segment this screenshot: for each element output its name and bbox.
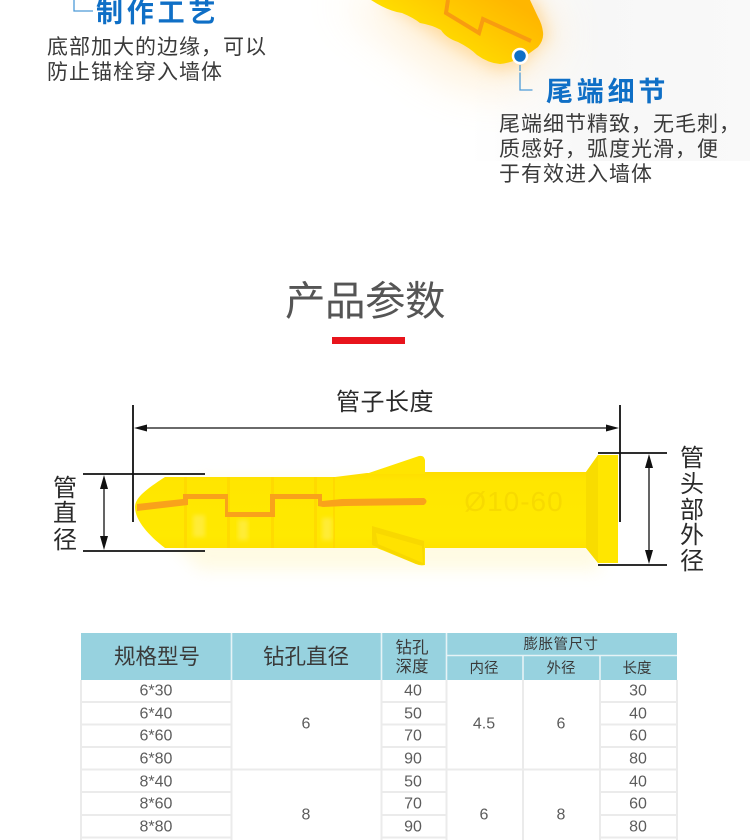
text: right callout description: 质感好，弧度光滑，便 [499, 138, 719, 161]
shaft [135, 472, 587, 548]
table values [140, 682, 647, 836]
table header [81, 633, 677, 680]
table values: 6*30 [140, 682, 173, 700]
heading: 尾端细节: 尾端细节 [546, 77, 669, 107]
table values: 8*60 [140, 796, 173, 812]
upper wing [360, 456, 425, 476]
leader line: right callout [520, 65, 538, 90]
table header: 外径 [546, 660, 576, 677]
product diagram [53, 389, 704, 575]
table header: 钻孔直径 [263, 645, 349, 669]
table values: 50 [404, 706, 422, 722]
table grid [81, 680, 677, 840]
table header: 膨胀管尺寸 [524, 636, 598, 653]
title underline [332, 337, 405, 344]
table values: 60 [629, 728, 647, 744]
table values: 6*80 [140, 750, 173, 768]
table values: 8 [557, 806, 566, 824]
table values: 70 [404, 728, 422, 744]
label: 管头部外径: 头 [680, 471, 704, 498]
dimension arrowheads [100, 424, 653, 564]
table values: 40 [629, 706, 647, 722]
rib highlights [193, 515, 332, 540]
label: 管头部外径: 管 [680, 445, 704, 472]
table header: 长度 [622, 660, 652, 677]
table values: 70 [404, 796, 422, 812]
marker dot [513, 49, 527, 63]
table values: 4.5 [473, 716, 495, 732]
lower wing [365, 540, 425, 565]
table values: 6 [480, 806, 489, 824]
label: 管头部外径: 外 [680, 522, 704, 549]
photo backdrop: top product shadow area [353, 0, 598, 106]
dowel body [135, 455, 618, 565]
table values: 50 [404, 774, 422, 790]
leader line: left callout [74, 0, 93, 11]
label: 管头部外径 [680, 445, 704, 575]
label: 管子长度: 管子长度 [336, 389, 434, 416]
table values: 90 [404, 750, 422, 768]
table header: 内径 [470, 660, 498, 677]
label: 管头部外径: 部 [680, 497, 704, 524]
lower wing recess [372, 526, 424, 565]
table header: 深度 [396, 657, 428, 676]
table values: 6 [302, 716, 311, 732]
label: 管头部外径: 径 [680, 548, 704, 575]
glow under dowel [140, 480, 600, 570]
spec table [81, 633, 677, 840]
orange slot [137, 494, 426, 517]
text: left callout description: 防止锚栓穿入墙体 [47, 61, 223, 84]
label: 管直径 [53, 475, 77, 554]
table values: 30 [629, 682, 647, 700]
table values: 8*40 [140, 774, 173, 790]
label: 管直径: 管 [53, 475, 77, 502]
table header: 钻孔 [396, 638, 428, 657]
text: left callout description: 底部加大的边缘，可以 [47, 36, 267, 59]
table values: 90 [404, 818, 422, 836]
table values: 6*40 [140, 706, 173, 722]
head shading [586, 455, 598, 563]
table values: 60 [629, 796, 647, 812]
rib shading [184, 477, 335, 548]
label: 管直径: 径 [53, 527, 77, 554]
table header: 规格型号 [114, 645, 200, 669]
callout: 制作工艺 [47, 0, 267, 84]
table values: 40 [629, 774, 647, 790]
text: right callout description: 于有效进入墙体 [499, 163, 653, 186]
table values: 8 [302, 806, 311, 824]
table values: 6*60 [140, 728, 173, 744]
callout: 尾端细节 [499, 49, 741, 186]
text: right callout description: 尾端细节精致，无毛刺， [499, 113, 741, 136]
table values: 80 [629, 750, 647, 768]
flared head [586, 455, 618, 563]
dimension lines [83, 405, 667, 565]
table values: 80 [629, 818, 647, 836]
label: 管直径: 直 [53, 500, 77, 527]
table values: 40 [404, 682, 422, 700]
title: 产品参数 [285, 278, 445, 324]
table values: 6 [557, 716, 566, 732]
top dowel tip [371, 0, 543, 64]
embossed size mark: Ø10-60 [464, 486, 564, 517]
table values: 8*80 [140, 818, 173, 836]
